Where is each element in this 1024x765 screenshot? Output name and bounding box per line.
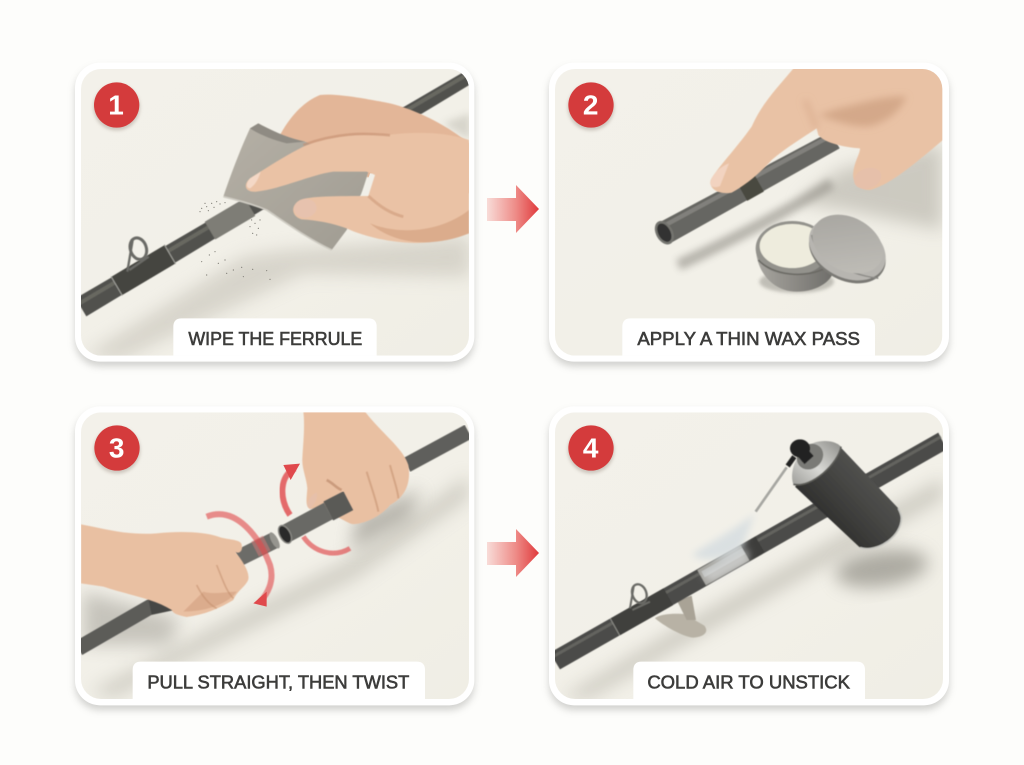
guide ring — [629, 582, 650, 610]
nozzle and straw — [756, 439, 810, 512]
tin lid — [808, 214, 886, 284]
label: apply a thin wax pass: APPLY A THIN WAX PASS — [637, 328, 860, 349]
label: cold air to unstick: COLD AIR TO UNSTICK — [647, 671, 851, 692]
spray can — [792, 438, 901, 549]
step badge 4 — [568, 425, 614, 474]
ferrule tube — [651, 132, 840, 248]
wax tin — [756, 221, 834, 293]
twist arrow lower left — [207, 514, 272, 607]
right hand — [302, 412, 409, 524]
label: cold air to unstick — [633, 662, 865, 699]
label: pull straight then twist: PULL STRAIGHT, THEN TWIST — [147, 671, 409, 692]
step badge 1: 1 — [108, 90, 124, 121]
right rod lower section — [276, 501, 348, 545]
cold spray mist — [692, 513, 755, 582]
step badge 2 — [568, 82, 614, 131]
label: wipe the ferrule — [173, 318, 377, 356]
panel 4: cold air to unstick — [549, 406, 949, 710]
hand front — [246, 133, 469, 243]
panel 3: pull straight then twist — [75, 406, 474, 710]
hand back finger — [280, 95, 469, 193]
step badge 3: 3 — [109, 433, 124, 464]
panel 2: apply a thin wax pass — [549, 63, 949, 366]
guide ring — [127, 236, 149, 272]
gap between fingers — [368, 173, 376, 178]
dust specks — [200, 202, 270, 279]
arrow: step 1 to step 2 — [487, 185, 539, 233]
label: pull straight then twist — [133, 662, 425, 699]
step badge 3 — [94, 425, 140, 474]
label: wipe the ferrule: WIPE THE FERRULE — [188, 328, 362, 349]
step badge 1 — [93, 82, 140, 131]
panel 1: wipe the ferrule — [75, 63, 474, 366]
rod — [76, 72, 470, 316]
infographic: four ferrule care steps — [72, 69, 952, 714]
arrow: step 3 to step 4 — [487, 529, 539, 577]
rod stand — [655, 596, 706, 638]
left hand — [81, 524, 249, 617]
rod — [550, 433, 947, 669]
label: apply a thin wax pass — [622, 318, 875, 356]
left rod section — [78, 531, 282, 648]
step badge 4: 4 — [583, 433, 599, 464]
hand holding ferrule — [710, 67, 945, 193]
polishing cloth — [223, 123, 368, 250]
hand creases and shadow — [805, 96, 907, 128]
twist arrow upper right — [282, 464, 350, 553]
right rod upper section — [407, 432, 468, 465]
step badge 2: 2 — [583, 90, 598, 121]
